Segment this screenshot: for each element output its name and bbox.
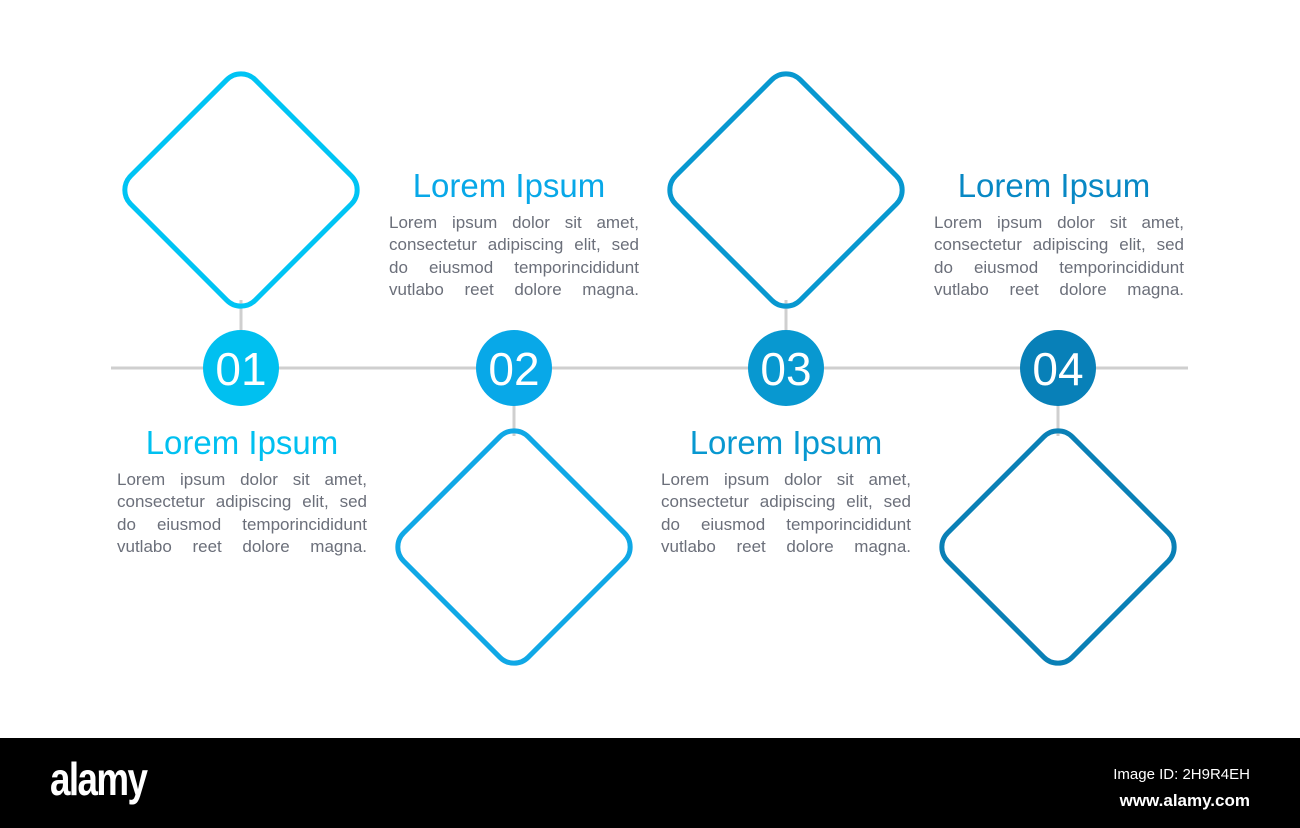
circle 02 [476, 330, 552, 406]
image id: www.alamy.com [1120, 791, 1250, 810]
heading 3: Lorem Ipsum [690, 424, 882, 461]
circle 02: 02 [488, 343, 540, 395]
diamond 1 [117, 66, 365, 314]
logo: alamy [50, 753, 146, 805]
text 1: Lorem ipsum dolor sit amet, consectetur adipiscing elit, sed do eiusmod temporincididunt vutlabo reet dolore magna. [117, 470, 367, 556]
image id: Image ID: 2H9R4EH [1113, 766, 1250, 783]
diamond 4 [934, 423, 1182, 671]
diamond 3 [662, 66, 910, 314]
heading 4: Lorem Ipsum [958, 167, 1150, 204]
timeline line [111, 300, 1188, 436]
diamond 2 [390, 423, 638, 671]
circle 04: 04 [1032, 343, 1084, 395]
circle 01: 01 [215, 343, 267, 395]
circle 01 [203, 330, 279, 406]
text 2: Lorem ipsum dolor sit amet, consectetur adipiscing elit, sed do eiusmod temporincididunt vutlabo reet dolore magna. [389, 213, 639, 299]
footer bar [0, 738, 1300, 828]
text 3: Lorem ipsum dolor sit amet, consectetur adipiscing elit, sed do eiusmod temporincididunt vutlabo reet dolore magna. [661, 470, 911, 556]
circle 03: 03 [760, 343, 812, 395]
heading 2: Lorem Ipsum [413, 167, 605, 204]
circle 03 [748, 330, 824, 406]
text 4: Lorem ipsum dolor sit amet, consectetur adipiscing elit, sed do eiusmod temporincididunt vutlabo reet dolore magna. [934, 213, 1184, 299]
heading 1: Lorem Ipsum [146, 424, 338, 461]
image id [1113, 766, 1250, 810]
circle 04 [1020, 330, 1096, 406]
